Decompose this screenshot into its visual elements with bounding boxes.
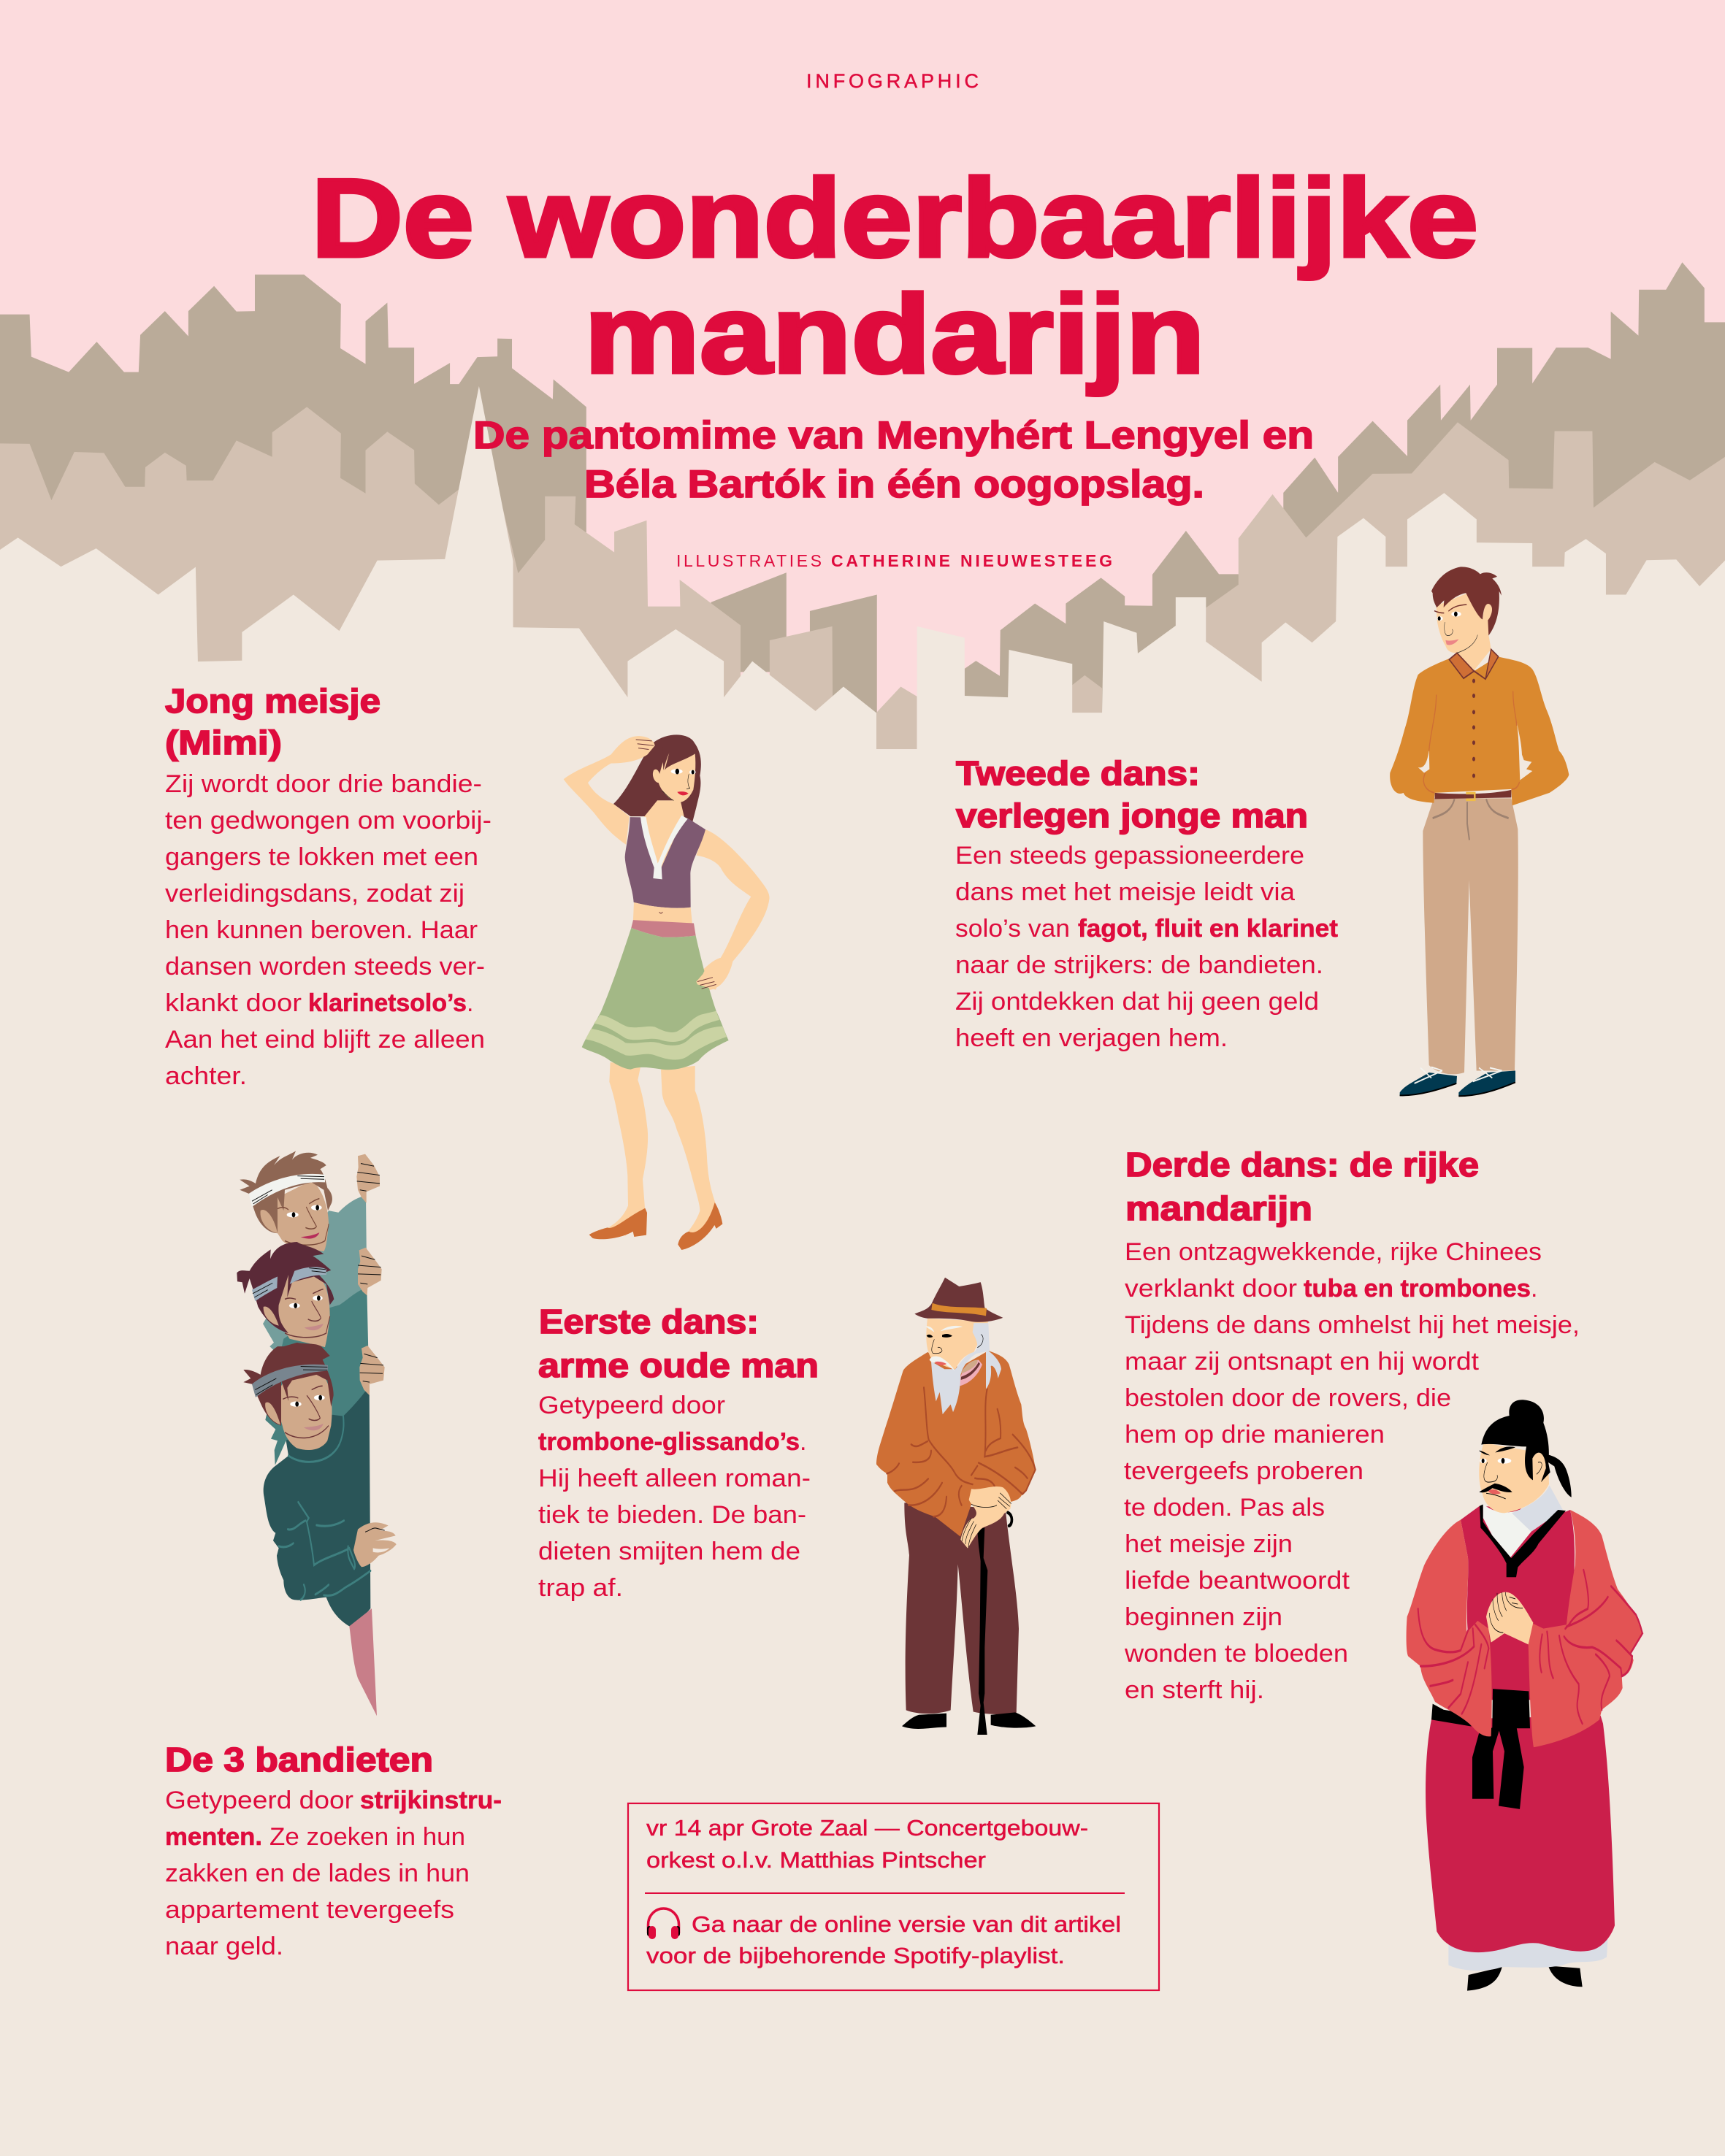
text: de 3 bandieten: Ze zoeken in hun	[269, 1823, 465, 1851]
text: derde dans: het meisje zijn	[1125, 1530, 1293, 1558]
bandit: middle	[237, 1242, 382, 1465]
heading: de 3 bandieten: De 3 bandieten	[165, 1741, 433, 1779]
text: de 3 bandieten: strijkinstru-	[360, 1787, 502, 1814]
text: tweede dans: solo’s van	[955, 915, 1070, 943]
heading: derde dans: Derde dans: de rijke	[1125, 1146, 1479, 1184]
heading: eerste dans	[538, 1303, 819, 1384]
heading: eerste dans: arme oude man	[538, 1346, 819, 1384]
text: eerste dans: Getypeerd door	[538, 1392, 725, 1419]
skyline right half	[876, 262, 1725, 2156]
text: derde dans: tuba en trombones	[1304, 1275, 1531, 1303]
text: tweede dans: Een steeds gepassioneerdere	[955, 842, 1304, 870]
bandit: top	[240, 1151, 380, 1354]
heading: tweede dans	[956, 754, 1308, 835]
illustrator credit: ILLUSTRATIES	[676, 551, 822, 570]
text: derde dans: maar zij ontsnapt en hij wordt	[1125, 1348, 1480, 1376]
heading: tweede dans: Tweede dans:	[956, 754, 1200, 792]
panel: eerste dans	[538, 1303, 819, 1602]
icon: headphones	[647, 1908, 680, 1939]
text: jong meisje: Aan het eind blijft ze alleen	[165, 1026, 485, 1054]
text: jong meisje: klankt door	[165, 989, 302, 1017]
title	[311, 156, 1478, 396]
text: jong meisje: achter.	[165, 1062, 247, 1090]
text: de 3 bandieten: naar geld.	[165, 1933, 283, 1960]
text: jong meisje	[165, 770, 492, 1090]
heading: jong meisje: (Mimi)	[165, 724, 282, 761]
text: tweede dans	[955, 842, 1338, 1052]
skyline left half	[0, 275, 877, 2156]
text: jong meisje: klarinetsolo’s	[308, 989, 467, 1017]
text: jong meisje: .	[467, 989, 473, 1017]
text: derde dans: Tijdens de dans omhelst hij het meisje,	[1125, 1311, 1580, 1339]
text: playlist	[646, 1911, 1121, 1968]
text: jong meisje: verleidingsdans, zodat zij	[165, 880, 464, 908]
subtitle: Béla Bartók in één oogopslag.	[584, 463, 1204, 506]
panel: tweede dans	[955, 754, 1338, 1052]
callout: concert info	[628, 1803, 1159, 1990]
text: tweede dans: naar de strijkers: de bandieten.	[955, 951, 1323, 979]
illustration: de 3 bandieten	[237, 1151, 397, 1716]
text: derde dans: te doden. Pas als	[1124, 1494, 1325, 1522]
text: derde dans	[1124, 1238, 1580, 1704]
heading: jong meisje	[165, 682, 380, 761]
panel: jong meisje	[165, 682, 492, 1090]
kicker: INFOGRAPHIC	[806, 70, 979, 92]
illustration: jong meisje	[564, 734, 770, 1250]
illustrator credit	[676, 551, 1112, 570]
bandit: bottom	[243, 1343, 397, 1716]
text: eerste dans	[538, 1392, 811, 1602]
text: jong meisje: ten gedwongen om voorbij-	[165, 807, 492, 835]
text: eerste dans: .	[800, 1428, 806, 1456]
text: derde dans: .	[1531, 1275, 1537, 1303]
heading: jong meisje: Jong meisje	[165, 682, 380, 720]
text: eerste dans: dieten smijten hem de	[538, 1538, 800, 1565]
text: derde dans: hem op drie manieren	[1125, 1421, 1385, 1449]
panel: de 3 bandieten	[165, 1741, 502, 1960]
illustration: verlegen jonge man	[1390, 567, 1569, 1096]
illustration: arme oude man	[876, 1278, 1036, 1735]
text: concert date	[646, 1815, 1088, 1873]
illustrator credit: CATHERINE NIEUWESTEEG	[831, 551, 1112, 570]
text: derde dans: wonden te bloeden	[1124, 1640, 1348, 1668]
subtitle	[473, 414, 1314, 506]
text: de 3 bandieten: appartement tevergeefs	[165, 1896, 454, 1924]
title: De wonderbaarlijke	[311, 156, 1478, 280]
text: derde dans: en sterft hij.	[1125, 1676, 1264, 1704]
text: concert date: vr 14 apr Grote Zaal — Concertgebouw-	[646, 1815, 1088, 1841]
text: jong meisje: Zij wordt door drie bandie-	[165, 770, 482, 798]
text: tweede dans: dans met het meisje leidt via	[955, 878, 1295, 906]
text: playlist: voor de bijbehorende Spotify-playlist.	[646, 1943, 1065, 1968]
text: playlist: Ga naar de online versie van dit artikel	[692, 1911, 1121, 1937]
text: eerste dans: tiek te bieden. De ban-	[538, 1501, 806, 1529]
text: jong meisje: hen kunnen beroven. Haar	[165, 916, 478, 944]
title: mandarijn	[584, 272, 1205, 396]
text: eerste dans: trap af.	[538, 1574, 623, 1602]
text: derde dans: bestolen door de rovers, die	[1125, 1384, 1451, 1412]
text: eerste dans: Hij heeft alleen roman-	[538, 1465, 811, 1492]
text: de 3 bandieten	[165, 1787, 502, 1960]
text: concert date: orkest o.l.v. Matthias Pintscher	[646, 1847, 986, 1873]
text: de 3 bandieten: Getypeerd door	[165, 1787, 353, 1814]
text: jong meisje: dansen worden steeds ver-	[165, 953, 485, 981]
text: eerste dans: trombone-glissando’s	[538, 1428, 800, 1456]
heading: eerste dans: Eerste dans:	[539, 1303, 759, 1340]
panel: derde dans	[1124, 1146, 1580, 1704]
illustration: rijke mandarijn	[1407, 1400, 1642, 1991]
heading: tweede dans: verlegen jonge man	[956, 797, 1308, 835]
text: jong meisje: gangers te lokken met een	[165, 843, 478, 871]
text: tweede dans: fagot, fluit en klarinet	[1078, 915, 1338, 943]
heading: derde dans	[1125, 1146, 1479, 1227]
text: derde dans: liefde beantwoordt	[1125, 1567, 1350, 1595]
text: tweede dans: Zij ontdekken dat hij geen geld	[955, 988, 1319, 1016]
text: derde dans: tevergeefs proberen	[1124, 1457, 1363, 1485]
subtitle: De pantomime van Menyhért Lengyel en	[473, 414, 1314, 457]
text: derde dans: beginnen zijn	[1125, 1603, 1282, 1631]
heading: derde dans: mandarijn	[1125, 1189, 1312, 1227]
text: derde dans: verklankt door	[1125, 1275, 1297, 1303]
text: derde dans: Een ontzagwekkende, rijke Chinees	[1125, 1238, 1542, 1266]
text: tweede dans: heeft en verjagen hem.	[955, 1024, 1228, 1052]
text: de 3 bandieten: menten.	[165, 1823, 262, 1851]
text: de 3 bandieten: zakken en de lades in hun	[165, 1860, 470, 1887]
